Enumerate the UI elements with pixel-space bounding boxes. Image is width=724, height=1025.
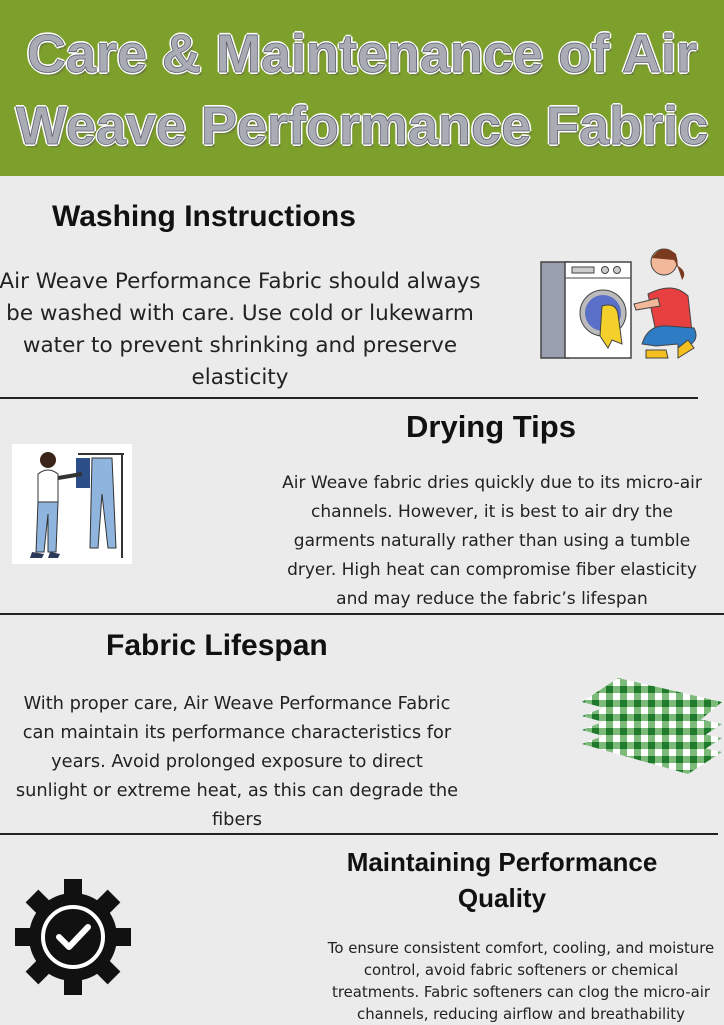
text: performance: channels, reducing airflow and breathability: [357, 1005, 685, 1023]
title: Weave Performance Fabric: [16, 96, 708, 156]
heading: maintaining performance quality: Quality: [458, 883, 546, 913]
text: performance: treatments. Fabric softeners can clog the micro-air: [332, 983, 710, 1001]
title: Care & Maintenance of Air: [27, 24, 697, 84]
heading: maintaining performance quality: [347, 847, 657, 913]
header banner: [0, 0, 724, 176]
text: drying: dryer. High heat can compromise fiber elasticity: [287, 560, 697, 580]
icon: woman with clothes rack: [12, 444, 132, 564]
text: washing: be washed with care. Use cold or lukewarm: [6, 301, 474, 326]
text: washing: elasticity: [192, 365, 288, 390]
text: lifespan: years. Avoid prolonged exposure to direct: [51, 751, 423, 772]
icon: washing machine with woman: [540, 248, 696, 359]
heading: maintaining performance quality: Maintaining Performance: [347, 847, 657, 877]
text: washing: [0, 269, 481, 390]
text: drying: channels. However, it is best to air dry the: [311, 502, 673, 522]
text: performance: [328, 939, 714, 1023]
icon: gear with checkmark: [15, 879, 131, 995]
text: drying: Air Weave fabric dries quickly due to its micro-air: [282, 473, 702, 493]
icon: folded checkered fabric: [582, 678, 722, 774]
text: lifespan: [16, 693, 458, 830]
text: drying: garments naturally rather than using a tumble: [294, 531, 690, 551]
text: drying: and may reduce the fabric’s lifespan: [336, 589, 648, 609]
heading: washing instructions: Washing Instructions: [52, 200, 356, 233]
text: washing: water to prevent shrinking and preserve: [23, 333, 457, 358]
text: performance: To ensure consistent comfort, cooling, and moisture: [328, 939, 714, 957]
text: lifespan: fibers: [212, 809, 262, 830]
title: [14, 24, 708, 156]
text: drying: [282, 473, 702, 609]
heading: drying tips: Drying Tips: [406, 409, 576, 444]
text: lifespan: With proper care, Air Weave Performance Fabric: [24, 693, 450, 714]
text: performance: control, avoid fabric softeners or chemical: [364, 961, 678, 979]
heading: fabric lifespan: Fabric Lifespan: [106, 629, 328, 662]
text: lifespan: can maintain its performance characteristics for: [23, 722, 451, 743]
text: washing: Air Weave Performance Fabric should always: [0, 269, 481, 294]
text: lifespan: sunlight or extreme heat, as this can degrade the: [16, 780, 458, 801]
